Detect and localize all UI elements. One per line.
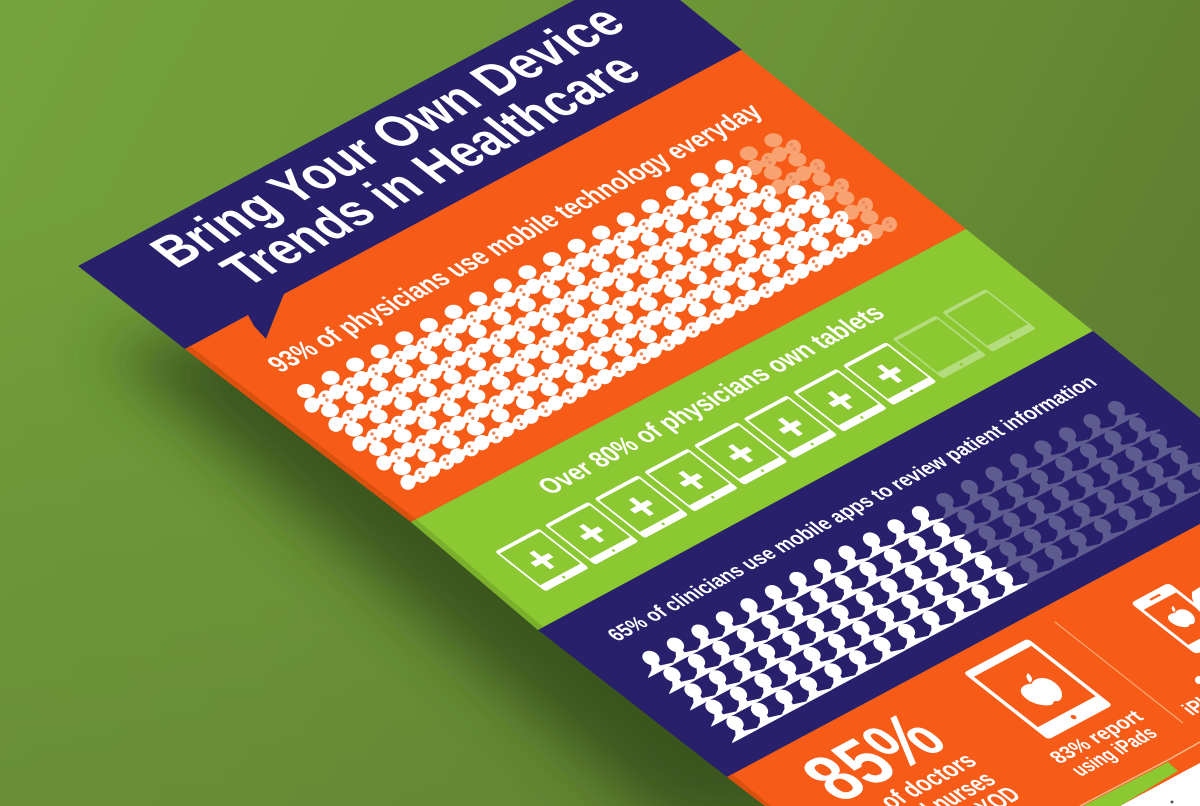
- small mark: [1170, 800, 1174, 804]
- heading: clinicians mobile apps: 65% of clinicians use mobile apps to review patient information: [602, 372, 1103, 645]
- panel: white lower section: [1080, 742, 1200, 806]
- caption: iPads: [1045, 707, 1168, 782]
- heading: physicians own tablets: Over 80% of physicians own tablets: [531, 300, 892, 500]
- panel: orange band: [185, 50, 966, 522]
- plus signs: [523, 361, 909, 573]
- panel: title band: [78, 0, 742, 349]
- heading: physicians mobile technology: 93% of physicians use mobile technology everyday: [261, 99, 770, 377]
- next device icon fragment: [1192, 587, 1200, 612]
- caption: iPads: using iPads: [1066, 723, 1163, 780]
- title: Bring Your Own Device: [137, 0, 638, 277]
- page edge thickness: [185, 346, 771, 806]
- divider: [1055, 622, 1183, 723]
- panel: green band: [411, 229, 1093, 630]
- icon: apple logo: [1008, 668, 1070, 710]
- speech bubble tail: [246, 294, 284, 339]
- next icon dot fragment: [1195, 676, 1200, 684]
- page shadow: [105, 330, 900, 806]
- panel: navy band: [538, 331, 1200, 777]
- chart: 8 of 10 tablets: [495, 289, 1036, 591]
- pale rule: [1080, 742, 1200, 806]
- green bar: [1083, 762, 1178, 806]
- panel: lower orange band: [727, 524, 1200, 806]
- chart: 65 percent clinician silhouettes: [640, 398, 1200, 743]
- chart: 93 of 100 physician icons: [297, 133, 897, 490]
- title: Trends in Healthcare: [208, 44, 654, 295]
- icon: small apple logo: [1159, 603, 1200, 630]
- icon: iPad: [963, 638, 1113, 740]
- icon: iPhone: [1131, 583, 1200, 654]
- caption: iPads: 83% report: [1045, 707, 1150, 768]
